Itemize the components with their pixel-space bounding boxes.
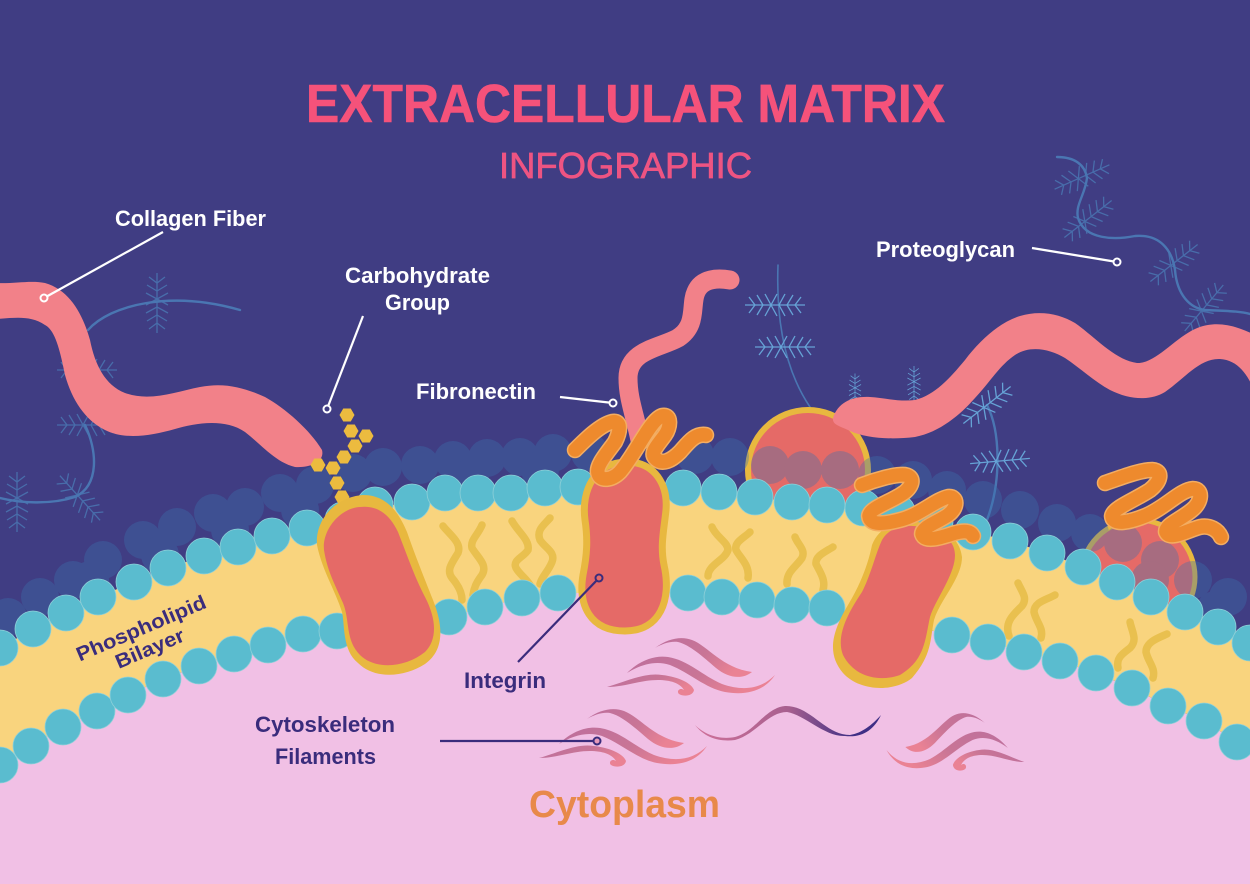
cytoskeleton filaments group top [607, 638, 775, 696]
label: cytoskeleton filaments [255, 712, 600, 769]
membrane protein sphere: right [1081, 520, 1195, 634]
integrin protein right [833, 522, 962, 688]
carbohydrate group [310, 408, 374, 504]
label: cytoskeleton filaments: Filaments [275, 744, 376, 769]
label: phospholipid bilayer: Phospholipid [73, 592, 210, 666]
label: phospholipid bilayer: Bilayer [112, 625, 188, 674]
label: integrin: Integrin [464, 668, 546, 693]
label: fibronectin: Fibronectin [416, 379, 536, 404]
orange coil right protein [862, 475, 973, 539]
fibronectin strand [628, 279, 730, 440]
cytoskeleton wave filament [695, 706, 881, 740]
cytoplasm [0, 593, 1250, 884]
label: carbohydrate group: Group [385, 290, 450, 315]
collagen fiber left [0, 282, 322, 467]
cytoskeleton filaments group left [539, 709, 707, 767]
label: carbohydrate group [324, 263, 490, 412]
lipid tails [443, 518, 1167, 678]
upper phospholipid heads [0, 469, 1250, 666]
label: carbohydrate group: Carbohydrate [345, 263, 490, 288]
collagen fiber right [833, 313, 1250, 438]
label: fibronectin [416, 379, 616, 406]
label: cytoskeleton filaments: Cytoskeleton [255, 712, 395, 737]
label: cytoplasm: Cytoplasm [529, 784, 720, 826]
proteoglycan threads [0, 155, 1250, 532]
label: proteoglycan: Proteoglycan [876, 237, 1015, 262]
lipid bilayer interior [0, 487, 1250, 765]
label: proteoglycan [876, 237, 1120, 266]
title: EXTRACELLULAR MATRIX [306, 74, 945, 134]
lower phospholipid heads [0, 575, 1250, 783]
faded outer phospholipid heads [0, 434, 1247, 636]
label: integrin [464, 574, 602, 693]
orange coil centre [575, 416, 706, 479]
integrin protein centre [582, 462, 666, 631]
integrin protein left [317, 495, 440, 675]
label: collagen fiber [40, 206, 266, 302]
membrane protein sphere: centre [748, 410, 868, 530]
cytoskeleton filaments group right [886, 713, 1024, 771]
subtitle: INFOGRAPHIC [499, 145, 752, 186]
label: collagen fiber: Collagen Fiber [115, 206, 266, 231]
orange coil far right [1105, 470, 1221, 537]
label: phospholipid bilayer [73, 592, 218, 686]
